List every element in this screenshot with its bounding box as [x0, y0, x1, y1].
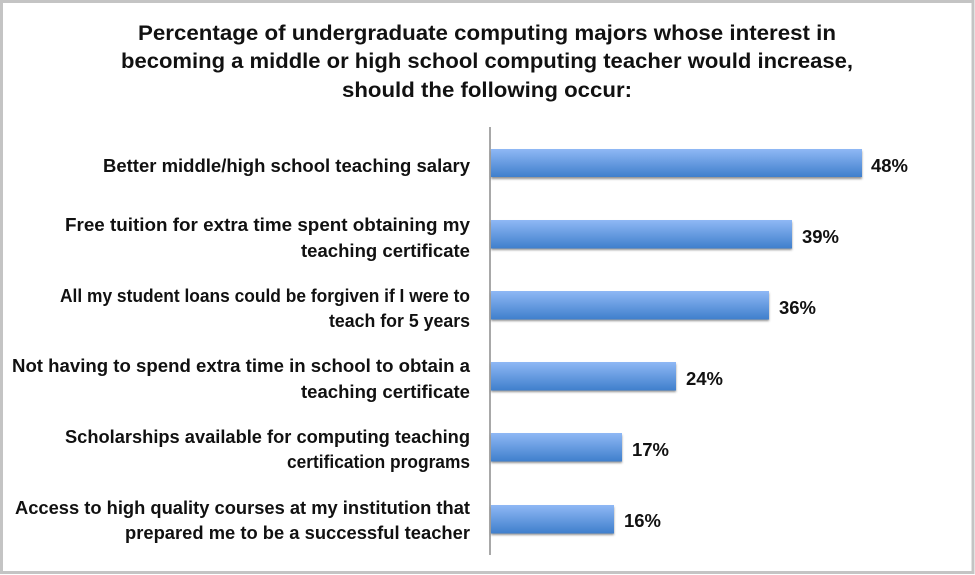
row: scholarships: 17% [632, 439, 669, 460]
row: student loans: 36% [779, 297, 816, 318]
row: free tuition [65, 215, 839, 261]
row: quality courses [15, 498, 661, 543]
row: no extra time: Not having to spend extra time in school to obtain a [12, 356, 471, 376]
row: no extra time [12, 356, 723, 402]
row: better salary [103, 149, 908, 179]
row: student loans: teach for 5 years [329, 311, 470, 331]
row: student loans [60, 286, 816, 331]
vertical axis [489, 127, 491, 555]
title: Percentage of undergraduate computing majors whose interest in [138, 22, 836, 45]
title [121, 22, 853, 102]
title: becoming a middle or high school computing teacher would increase, [121, 50, 853, 73]
row: better salary: Better middle/high school teaching salary [103, 156, 470, 176]
row: quality courses: Access to high quality courses at my institution that [15, 498, 470, 518]
row: student loans: All my student loans could be forgiven if I were to [60, 286, 470, 306]
row: quality courses: prepared me to be a successful teacher [125, 523, 470, 543]
row: better salary: 48% [871, 155, 908, 176]
row: scholarships [65, 427, 669, 472]
row: free tuition: 39% [802, 226, 839, 247]
row: no extra time: teaching certificate [301, 382, 470, 402]
row: quality courses: 16% [624, 510, 661, 531]
row: free tuition: Free tuition for extra time spent obtaining my [65, 215, 470, 235]
row: free tuition: teaching certificate [301, 241, 470, 261]
row: scholarships: certification programs [287, 452, 470, 472]
row: scholarships: Scholarships available for computing teaching [65, 427, 470, 447]
title: should the following occur: [342, 79, 632, 102]
row: no extra time: 24% [686, 368, 723, 389]
